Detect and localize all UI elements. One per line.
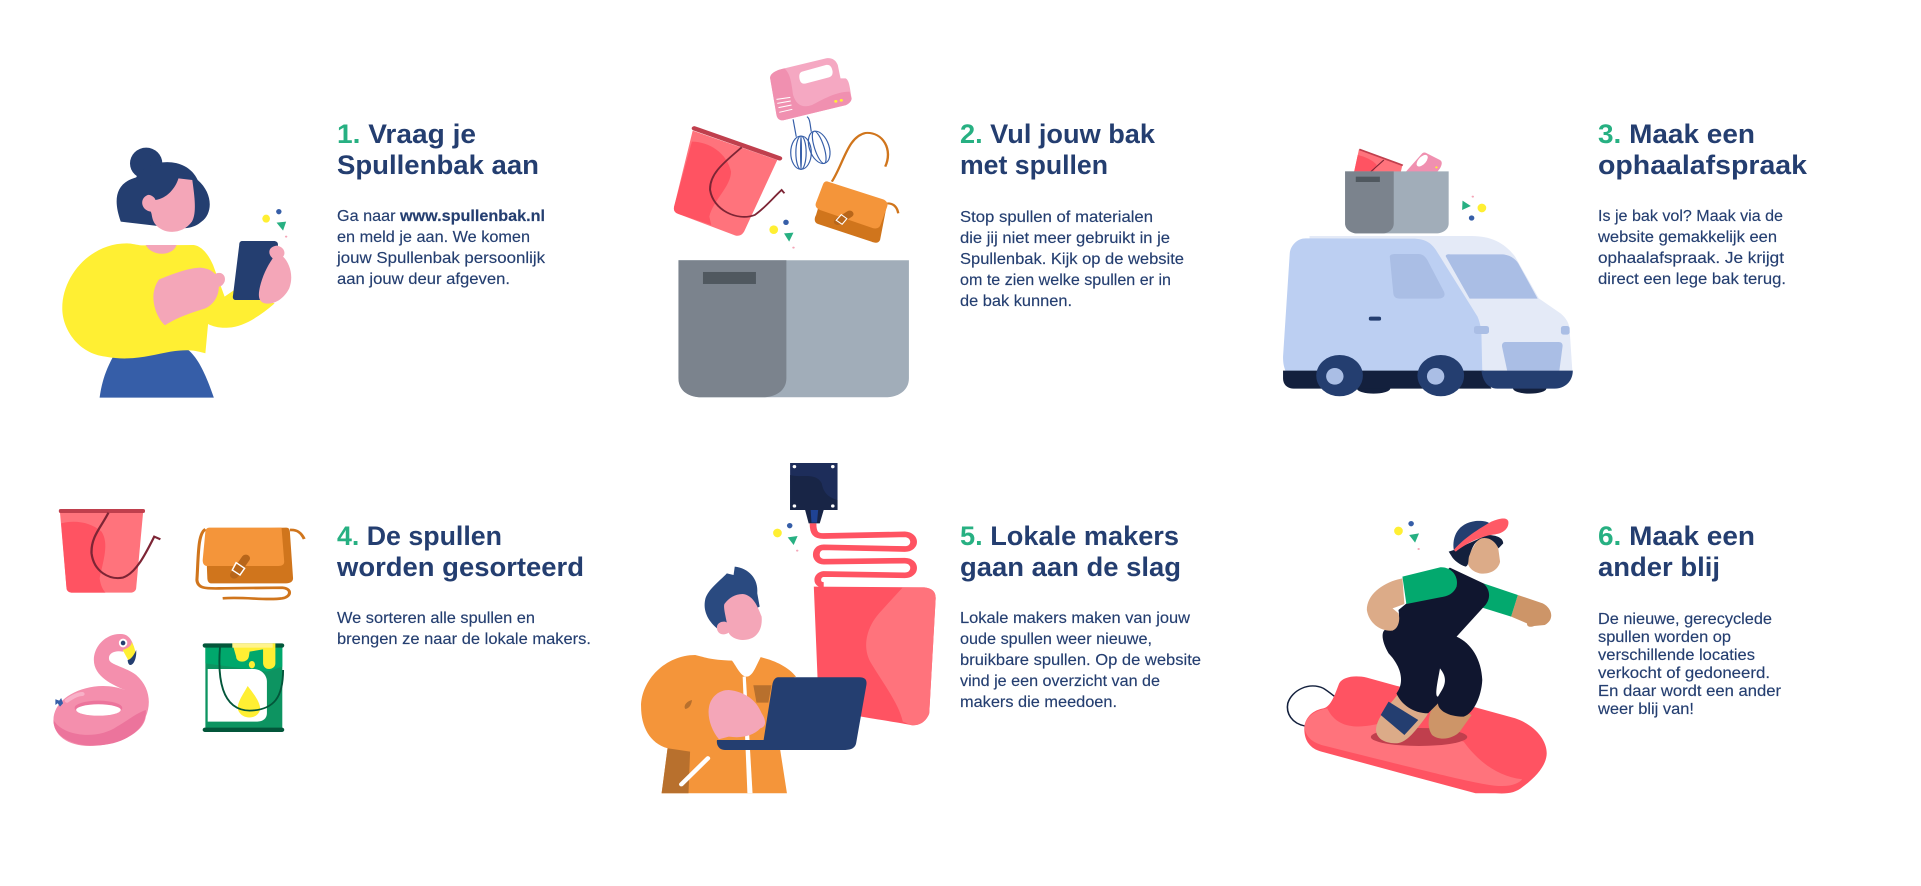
- body text 5: makers die meedoen.: [960, 694, 1117, 711]
- confetti: [1394, 521, 1420, 550]
- confetti: [769, 220, 795, 249]
- laptop: [717, 677, 867, 750]
- body text 6: verschillende locaties: [1598, 647, 1755, 664]
- arm: [153, 268, 225, 325]
- confetti: [262, 209, 287, 238]
- black suit: [1383, 568, 1489, 717]
- sweater: [62, 243, 275, 358]
- body text 4: We sorteren alle spullen en: [337, 610, 535, 627]
- heading 1: [337, 119, 539, 180]
- heading 3: 3. Maak een: [1598, 119, 1755, 149]
- body text 5: vind je een overzicht van de: [960, 673, 1160, 690]
- maker face: [717, 594, 762, 640]
- heading 5: [960, 521, 1181, 582]
- flamingo float: [53, 634, 149, 746]
- body text 1: Ga naar www.spullenbak.nl: [337, 208, 545, 225]
- heading 3: [1598, 119, 1808, 180]
- phone: [233, 241, 278, 300]
- maker jacket: [641, 655, 796, 793]
- body text 6: [1597, 611, 1782, 718]
- bin on roof: [1345, 171, 1449, 233]
- van: [1283, 236, 1573, 396]
- panel: step 5 text: [960, 521, 1201, 711]
- body text 5: Lokale makers maken van jouw: [960, 610, 1190, 627]
- 3D printer: [790, 463, 838, 523]
- body text 2: om te zien welke spullen er in: [960, 272, 1171, 289]
- handbag: [815, 133, 898, 243]
- head with cap: [1449, 519, 1508, 574]
- heading 1: Spullenbak aan: [337, 150, 539, 180]
- panel: step 1 text: [336, 119, 546, 288]
- left arm: [1367, 567, 1457, 631]
- hair: [117, 148, 210, 228]
- body text 2: [960, 209, 1184, 310]
- heading 3: ophaalafspraak: [1598, 150, 1808, 180]
- skirt: [100, 348, 214, 398]
- heading 2: 2. Vul jouw bak: [960, 119, 1156, 149]
- heading 6: [1598, 521, 1755, 582]
- heading 4: [336, 521, 584, 582]
- panel: step 3 text: [1597, 119, 1808, 288]
- body text 2: de bak kunnen.: [960, 293, 1072, 310]
- heading 1: 1. Vraag je: [337, 119, 476, 149]
- items in bin on roof: [1354, 149, 1442, 173]
- neck: [146, 245, 177, 254]
- heading 4: worden gesorteerd: [336, 552, 584, 582]
- heading 5: 5. Lokale makers: [960, 521, 1179, 551]
- panel: step 4 text: [336, 521, 591, 648]
- bin: [678, 260, 909, 397]
- body text 6: En daar wordt een ander: [1598, 683, 1782, 700]
- body text 5: [960, 610, 1201, 711]
- body text 6: verkocht of gedoneerd.: [1598, 665, 1770, 682]
- panel: step 2 illustration, items falling in bin: [674, 58, 909, 397]
- heading 2: met spullen: [960, 150, 1108, 180]
- body text 3: direct een lege bak terug.: [1598, 271, 1786, 288]
- body text 3: website gemakkelijk een: [1597, 229, 1777, 246]
- panel: step 5 illustration, maker with 3D printer: [641, 463, 936, 793]
- hand mixer: [770, 58, 852, 169]
- face: [142, 178, 195, 232]
- legs: [1376, 693, 1472, 743]
- body text 5: bruikbare spullen. Op de website: [960, 652, 1201, 669]
- panel: step 2 text: [960, 119, 1184, 310]
- confetti: [1462, 196, 1486, 221]
- sled: [1304, 676, 1547, 794]
- arms and sleeves: [1481, 583, 1551, 627]
- heading 4: 4. De spullen: [337, 521, 502, 551]
- bucket: [674, 128, 784, 236]
- body text 3: Is je bak vol? Maak via de: [1598, 208, 1783, 225]
- body text 1: en meld je aan. We komen: [337, 229, 530, 246]
- paint can: [203, 643, 284, 732]
- body text 4: brengen ze naar de lokale makers.: [337, 631, 591, 648]
- body text 3: [1597, 208, 1786, 288]
- body text 1: [336, 208, 546, 288]
- panel: step 1 illustration, woman with phone: [62, 148, 291, 398]
- body text 2: die jij niet meer gebruikt in je: [960, 230, 1170, 247]
- handbag: [197, 528, 304, 599]
- body text 6: weer blij van!: [1597, 701, 1694, 718]
- body text 6: De nieuwe, gerecyclede: [1598, 611, 1772, 628]
- panel: step 6 illustration, person on sled: [1287, 519, 1551, 794]
- sled wire: [1287, 686, 1381, 726]
- body text 2: Stop spullen of materialen: [960, 209, 1153, 226]
- panel: step 6 text: [1597, 521, 1782, 718]
- body text 4: [337, 610, 591, 648]
- body text 5: oude spullen weer nieuwe,: [960, 631, 1152, 648]
- confetti: [773, 523, 798, 552]
- printed red sheet with filament: [813, 523, 936, 725]
- maker hand: [709, 690, 765, 739]
- maker hair: [705, 567, 760, 628]
- bucket: [59, 509, 160, 593]
- heading 2: [960, 119, 1156, 180]
- heading 6: ander blij: [1598, 552, 1720, 582]
- heading 5: gaan aan de slag: [960, 552, 1181, 582]
- body text 1: jouw Spullenbak persoonlijk: [336, 250, 546, 267]
- body text 6: spullen worden op: [1598, 629, 1731, 646]
- body text 2: Spullenbak. Kijk op de website: [960, 251, 1184, 268]
- panel: step 3 illustration, van with bin: [1283, 149, 1573, 396]
- heading 6: 6. Maak een: [1598, 521, 1755, 551]
- body text 3: ophaalafspraak. Je krijgt: [1598, 250, 1785, 267]
- hand: [259, 246, 291, 304]
- gap between legs: [1436, 668, 1445, 697]
- panel: step 4 illustration, sorted items: [53, 509, 304, 746]
- body text 1: aan jouw deur afgeven.: [337, 271, 510, 288]
